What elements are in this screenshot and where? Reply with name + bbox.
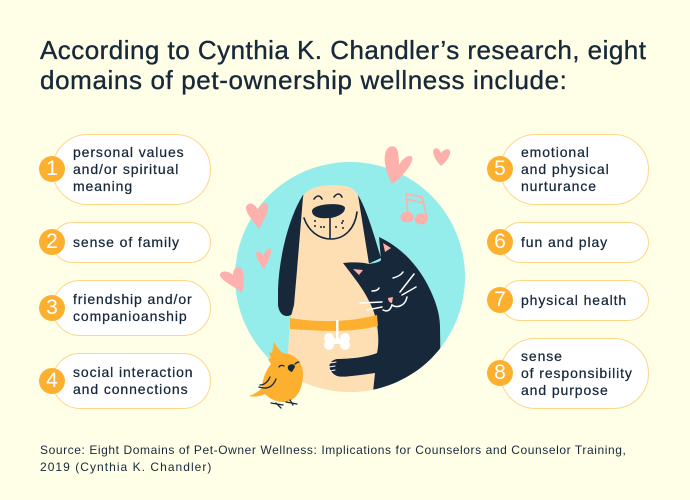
dog ear left (278, 195, 310, 316)
item 5: emotional (521, 144, 590, 160)
item 8: of responsibility (521, 365, 633, 381)
item 1 (39, 134, 211, 205)
dog ear right (355, 195, 381, 264)
title: According to Cynthia K. Chandler’s research, eight (40, 35, 646, 65)
item 5: and physical (521, 161, 610, 177)
item 5 (487, 134, 649, 205)
item 6: 6 (494, 230, 506, 253)
dog body (288, 185, 383, 392)
item 5: nurturance (521, 178, 597, 194)
item 7: 7 (494, 288, 506, 311)
item 1: and/or spiritual (73, 161, 179, 177)
title (40, 35, 646, 95)
hearts (220, 146, 450, 293)
item 2: 2 (46, 230, 58, 253)
item 5: 5 (494, 157, 506, 180)
item 4: 4 (46, 369, 58, 392)
illustration: dog, cat, bird and hearts (220, 146, 465, 409)
item 3 (39, 280, 211, 336)
item 7 (487, 280, 649, 321)
dog face (304, 194, 357, 239)
collar (290, 315, 378, 331)
item 1: meaning (73, 178, 133, 194)
item 3: 3 (46, 296, 58, 319)
source note: 2019 (Cynthia K. Chandler) (40, 460, 212, 474)
item 8: sense (521, 348, 563, 364)
source note (40, 443, 626, 474)
item 2 (39, 222, 211, 263)
bird (249, 342, 303, 402)
item 8: and purpose (521, 382, 609, 398)
item 8 (487, 338, 649, 409)
item 6: fun and play (521, 234, 608, 250)
item 2: sense of family (73, 234, 180, 250)
music notes (400, 194, 428, 224)
item 1: 1 (46, 157, 58, 180)
teal circle (235, 162, 465, 392)
item 8: 8 (494, 361, 506, 384)
cat details (329, 272, 416, 371)
item 4 (39, 353, 211, 409)
item 3: companioanship (73, 308, 188, 324)
title: domains of pet-ownership wellness include: (40, 65, 568, 95)
item 7: physical health (521, 292, 627, 308)
source note: Source: Eight Domains of Pet-Owner Wellness: Implications for Counselors and Counselor Training, (40, 443, 626, 457)
item 4: and connections (73, 381, 188, 397)
item 1: personal values (73, 144, 185, 160)
item 3: friendship and/or (73, 291, 193, 307)
item 6 (487, 222, 649, 263)
item 4: social interaction (73, 364, 193, 380)
bone tag (324, 320, 350, 350)
cat (329, 237, 441, 400)
